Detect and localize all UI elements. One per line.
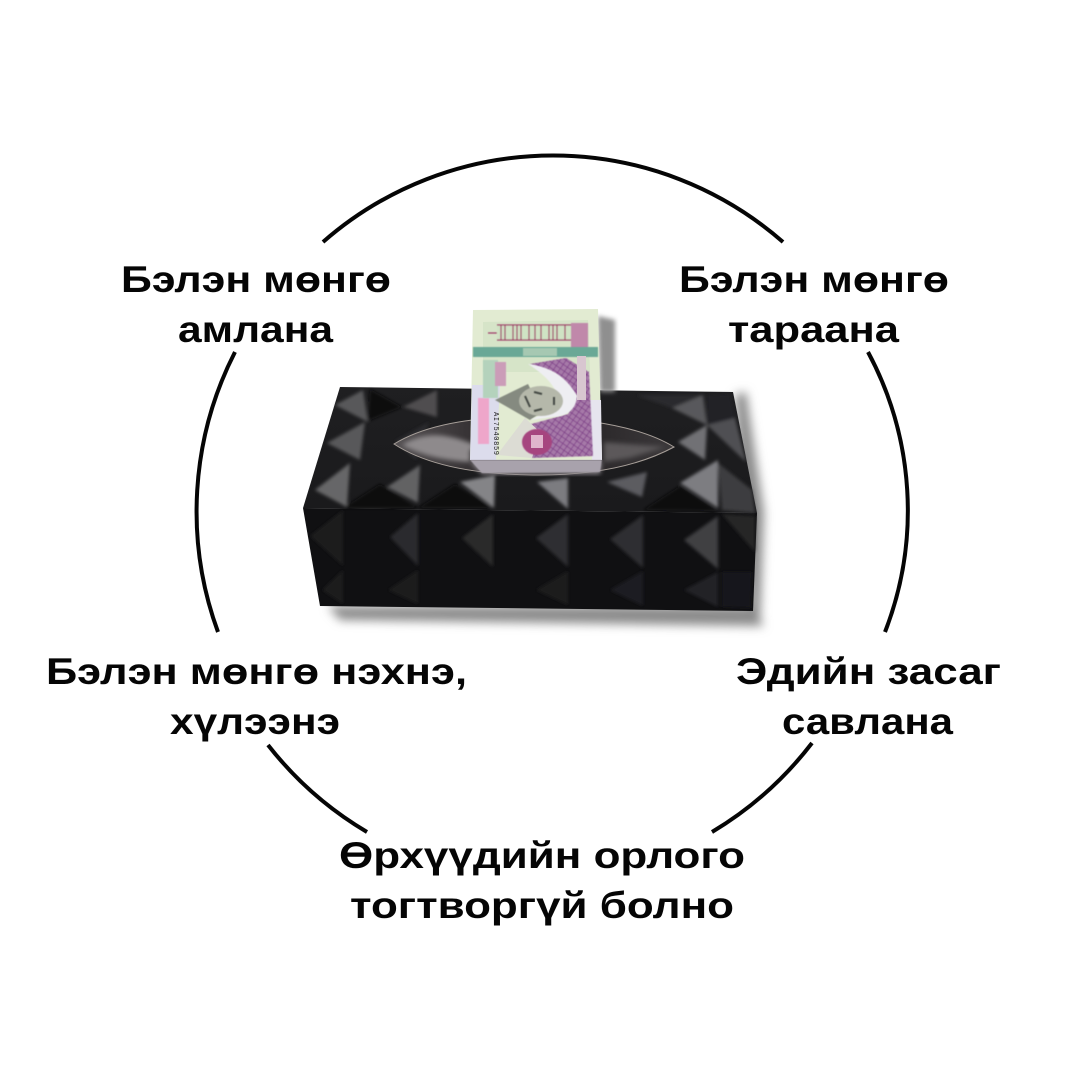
- box top face: [303, 387, 757, 513]
- label: bottom right: савлана: [782, 701, 953, 742]
- pyramid pattern on front face: [310, 510, 755, 608]
- serial number: AI7540859: [491, 412, 499, 455]
- box opening: [394, 417, 674, 475]
- label: bottom right: Эдийн засаг: [736, 651, 1001, 692]
- green side stripe: [483, 360, 498, 398]
- label: top right: Бэлэн мөнгө: [679, 259, 949, 300]
- box drop shadow: [328, 392, 764, 626]
- portrait face: [519, 386, 563, 416]
- label: bottom right: [736, 651, 1001, 742]
- box front face: [303, 508, 757, 611]
- pink side stripe: [478, 398, 489, 444]
- label: bottom left: Бэлэн мөнгө нэхнэ,: [46, 651, 467, 692]
- label: bottom left: хүлээнэ: [170, 701, 340, 742]
- label: top left: Бэлэн мөнгө: [121, 259, 391, 300]
- label: bottom left: [46, 651, 467, 742]
- pyramid pattern on top face: [315, 389, 755, 513]
- banknote: [470, 309, 602, 473]
- banknote shadow: [598, 316, 615, 392]
- lower paper tint: [470, 385, 500, 460]
- lower light portion of coat: [497, 418, 540, 458]
- portrait hair: [495, 384, 542, 420]
- purple guilloche pattern: [524, 358, 593, 458]
- denomination label: [495, 362, 506, 386]
- label: top right: тараана: [728, 309, 899, 350]
- label: bottom centre: [339, 835, 745, 926]
- label: bottom centre: Өрхүүдийн орлого: [339, 835, 745, 876]
- tissue box with banknote: [303, 309, 764, 626]
- note reflection: [470, 460, 602, 473]
- purple crest: [522, 429, 552, 455]
- label: top right: [679, 259, 949, 350]
- note paper: [470, 309, 602, 460]
- portrait headdress: [528, 364, 577, 420]
- label: top left: [121, 259, 391, 350]
- watermark panel: [483, 320, 590, 372]
- label: bottom centre: тогтворгүй болно: [350, 885, 734, 926]
- label: top left: амлана: [178, 309, 333, 350]
- title band: [488, 323, 588, 351]
- green security band: [473, 347, 598, 357]
- denomination column: [577, 356, 586, 400]
- cycle ring made of five arcs: [197, 155, 908, 832]
